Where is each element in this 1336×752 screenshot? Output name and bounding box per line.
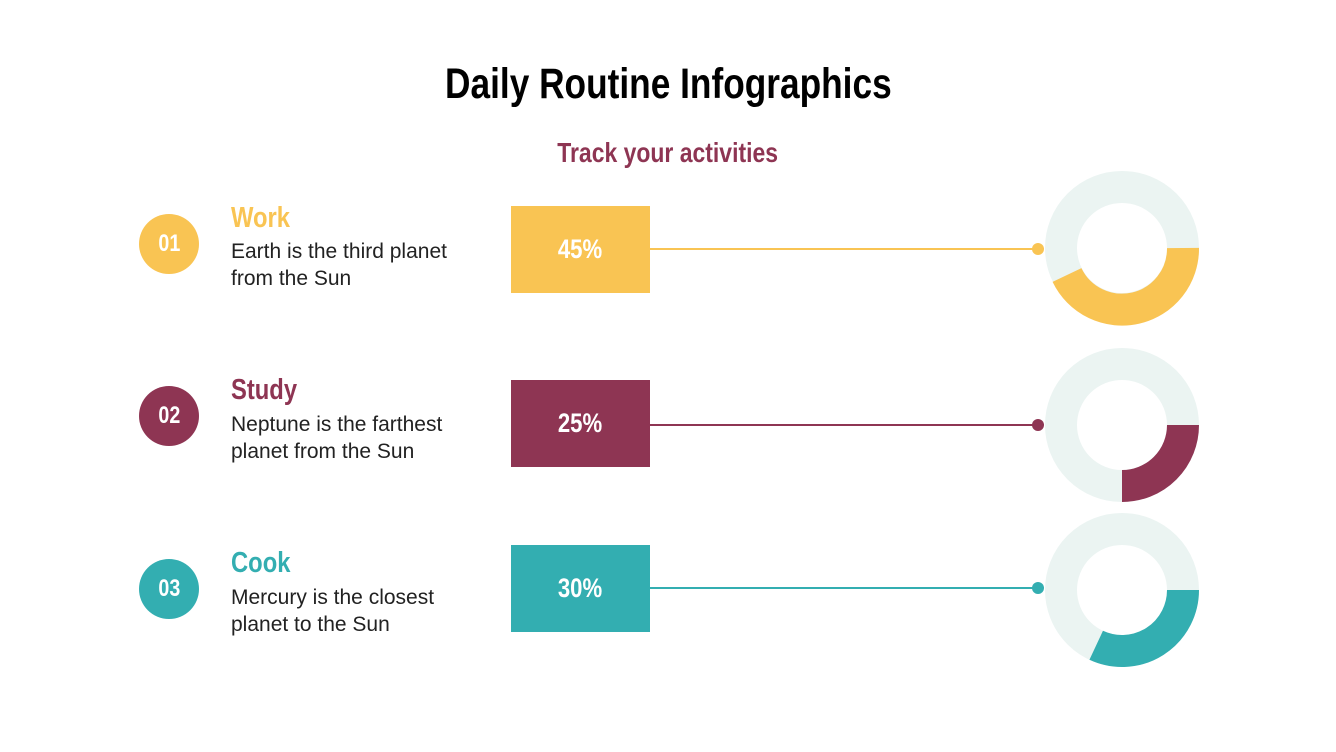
row 2: study: 02 bbox=[158, 402, 180, 429]
row 3 text bbox=[231, 586, 434, 636]
row 1 text: from the Sun bbox=[231, 267, 351, 290]
row 3 text: planet to the Sun bbox=[231, 613, 390, 636]
row 2: study bbox=[139, 374, 297, 446]
row 3 text: Mercury is the closest bbox=[231, 586, 434, 609]
title: Daily Routine Infographics bbox=[445, 60, 891, 108]
row 1 box: 45% bbox=[558, 234, 603, 264]
row 3: cook bbox=[139, 547, 290, 619]
row 1 text bbox=[231, 240, 447, 290]
row 3: cook: Cook bbox=[231, 547, 290, 579]
row 1 box bbox=[511, 206, 650, 293]
subtitle: Track your activities bbox=[558, 137, 778, 168]
row 1 text: Earth is the third planet bbox=[231, 240, 447, 263]
row 2 text: Neptune is the farthest bbox=[231, 413, 442, 436]
row 1: work bbox=[139, 202, 290, 274]
row 2: study: Study bbox=[231, 374, 297, 406]
row 3 box bbox=[511, 545, 650, 632]
row 2 text: planet from the Sun bbox=[231, 440, 414, 463]
row 2 text bbox=[231, 413, 442, 463]
row 1: work: 01 bbox=[158, 230, 180, 257]
row 3 box: 30% bbox=[558, 573, 603, 603]
row 2 box: 25% bbox=[558, 408, 603, 438]
row 1: work: Work bbox=[231, 202, 290, 234]
row 3: cook: 03 bbox=[158, 575, 180, 602]
row 2 box bbox=[511, 380, 650, 467]
